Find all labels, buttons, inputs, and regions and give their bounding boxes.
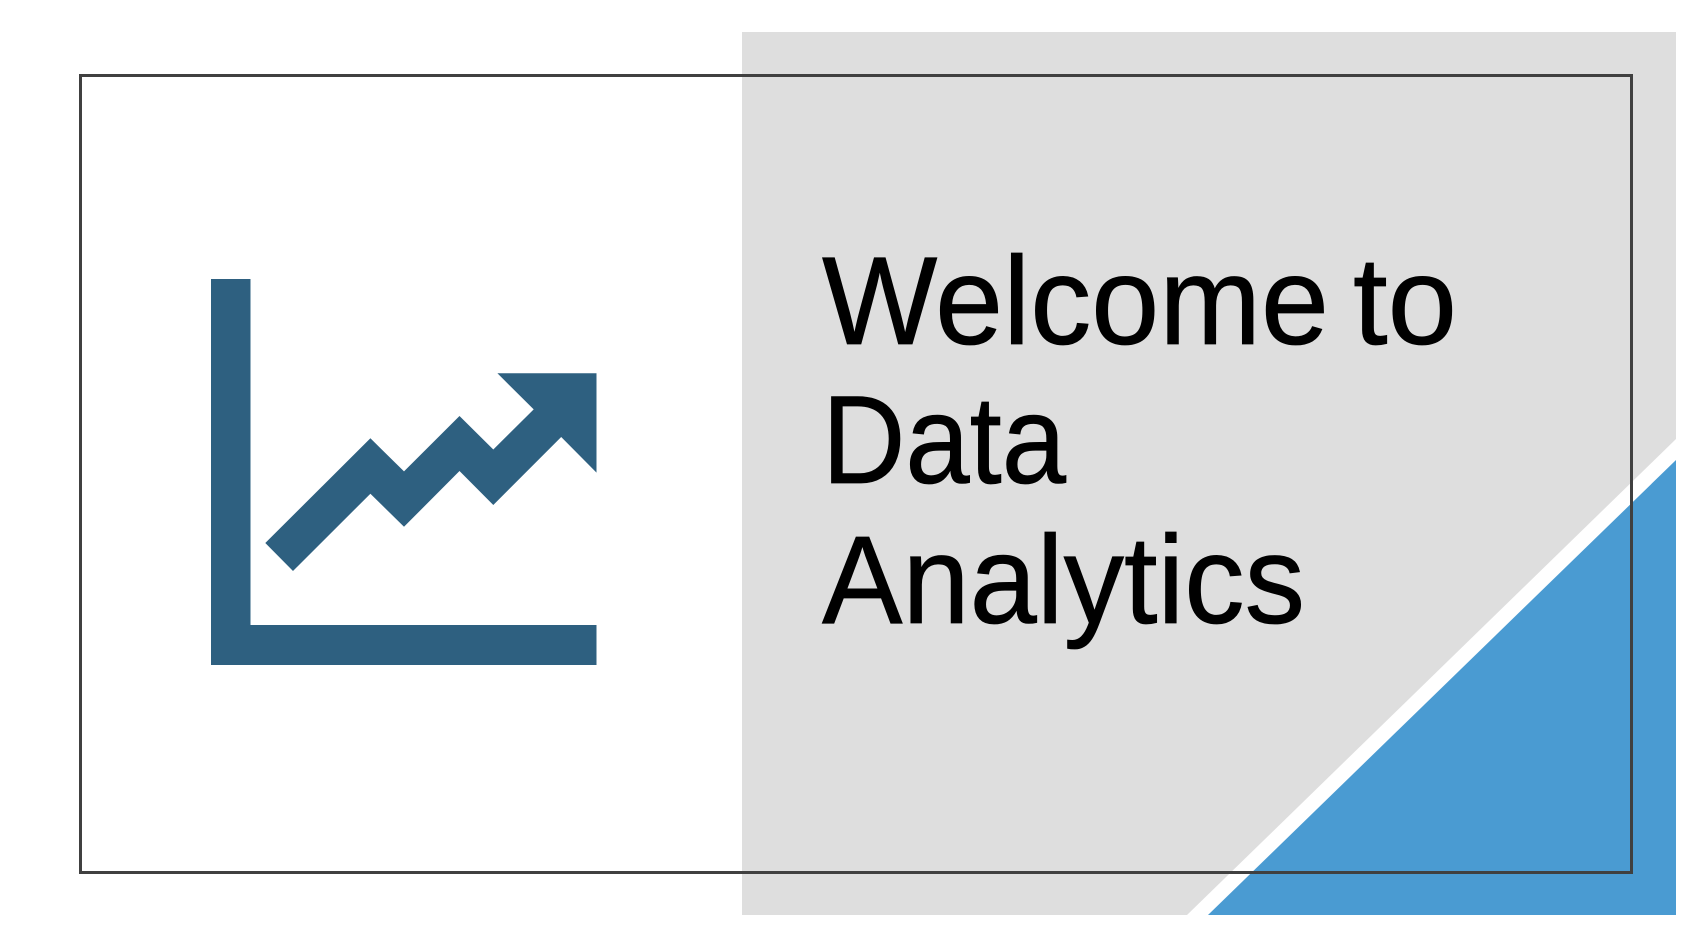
title line 3: Analytics [822, 511, 1305, 650]
frame outline [80, 76, 1632, 872]
grey panel [742, 32, 1676, 915]
white diagonal band [1187, 439, 1676, 915]
title line 2: Data [822, 371, 1066, 510]
icon: rising arrow [265, 373, 596, 571]
title line 1: to [1353, 232, 1457, 371]
title [822, 232, 1457, 650]
blue corner triangle [1208, 460, 1676, 915]
title line 1: Welcome [822, 232, 1329, 371]
icon: line chart with rising arrow [211, 279, 596, 665]
icon: chart axes [211, 279, 596, 665]
